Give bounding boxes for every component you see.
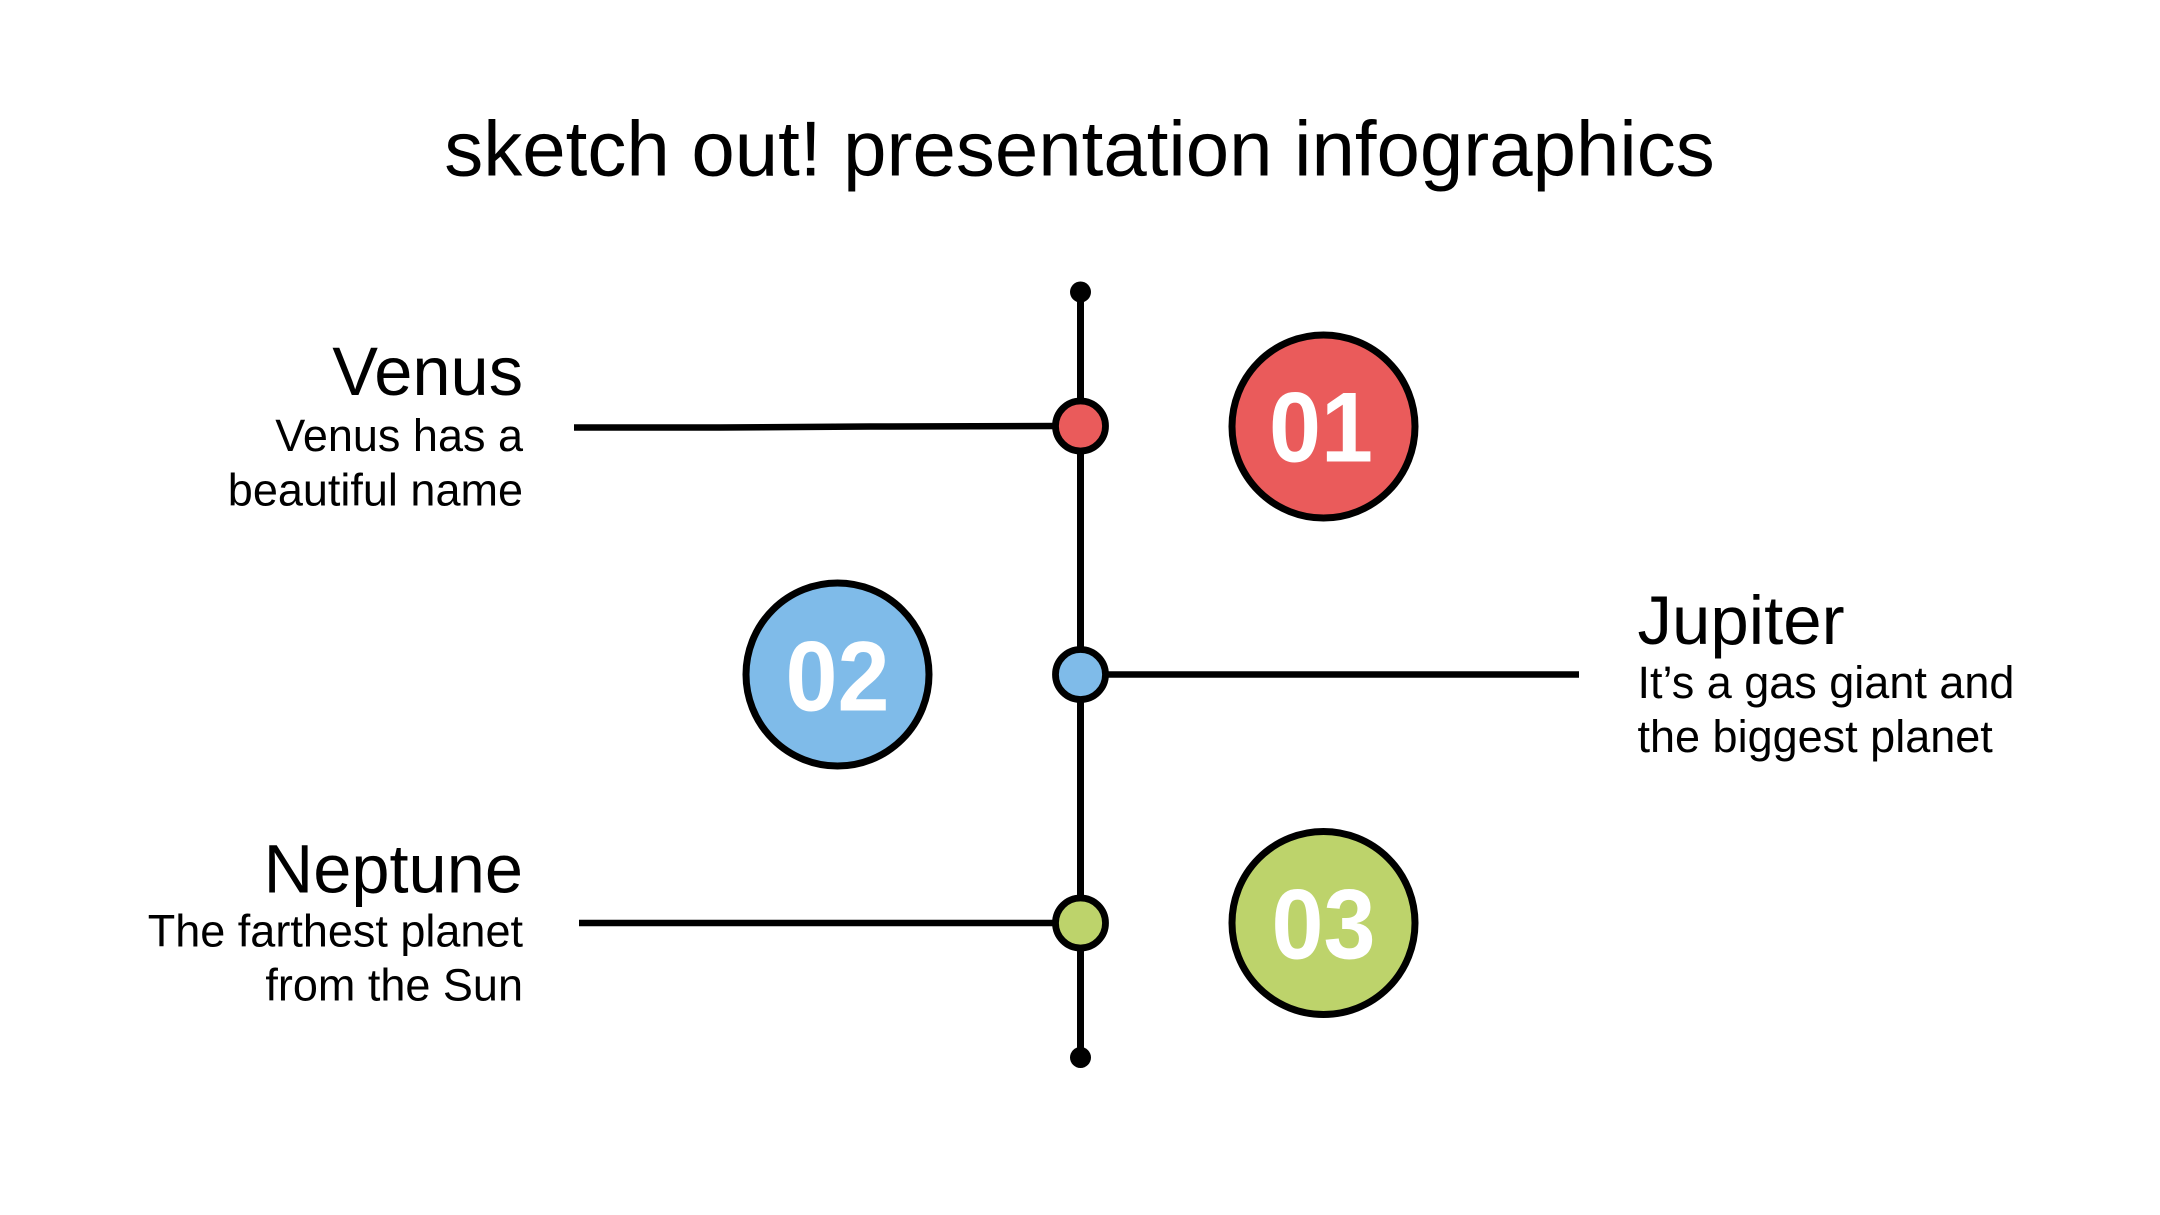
text block: Neptune: from the Sun [265, 960, 523, 1010]
badge 03: 03 [1272, 868, 1376, 980]
text block: Jupiter [1638, 582, 2014, 762]
node: Venus [1056, 401, 1106, 451]
badge 01 [1232, 335, 1415, 518]
title: sketch out! presentation infographics [444, 104, 1715, 192]
vertical timeline [1070, 282, 1091, 1068]
connector: Venus [574, 426, 1060, 428]
text block: Jupiter: the biggest planet [1638, 711, 1993, 762]
text block: Venus [228, 333, 524, 516]
text block: Jupiter: It’s a gas giant and [1638, 657, 2014, 708]
text block: Venus: Venus has a [275, 410, 524, 461]
badge 02 [746, 583, 929, 766]
text block: Neptune [148, 830, 523, 1010]
connector: Neptune [579, 920, 1060, 926]
text block: Jupiter: Jupiter [1638, 582, 1845, 659]
node: Neptune [1056, 898, 1106, 948]
badge 03 [1232, 832, 1415, 1014]
text block: Neptune: The farthest planet [148, 906, 523, 956]
connector: Jupiter [1100, 671, 1579, 678]
text block: Venus: Venus [332, 333, 523, 410]
node: Jupiter [1056, 650, 1106, 700]
badge 02: 02 [786, 620, 890, 732]
text block: Neptune: Neptune [264, 830, 523, 908]
text block: Venus: beautiful name [228, 464, 523, 516]
badge 01: 01 [1269, 372, 1373, 482]
